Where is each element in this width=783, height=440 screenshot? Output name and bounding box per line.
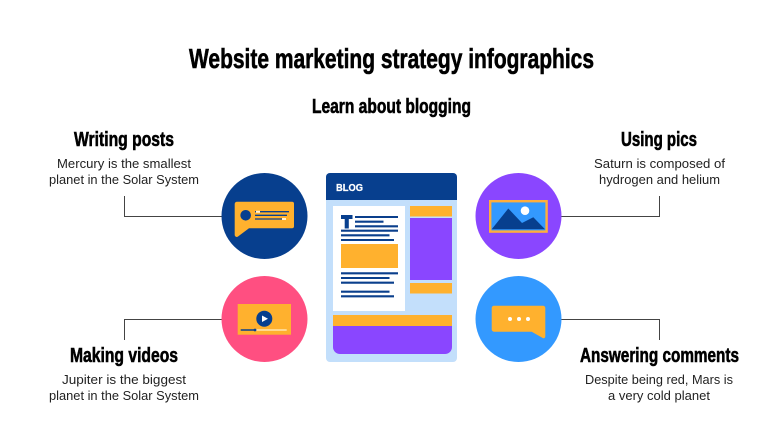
- text block: writing posts: planet in the Solar System: [49, 172, 199, 187]
- icon: writing posts speech bubble: [222, 173, 308, 259]
- text block: making videos: Jupiter is the biggest: [62, 372, 186, 387]
- text block: using pics: Saturn is composed of: [594, 156, 725, 171]
- icon: making videos player: [222, 276, 308, 362]
- text block: writing posts: Mercury is the smallest: [57, 156, 191, 171]
- title: Website marketing strategy infographics: [189, 43, 594, 74]
- article card: [333, 206, 405, 311]
- text block: making videos: planet in the Solar System: [49, 388, 199, 403]
- connector: writing posts: [124, 196, 222, 216]
- panel: blog page illustration: [326, 173, 457, 362]
- connector: using pics: [561, 196, 660, 216]
- text block: answering comments: Answering comments: [580, 345, 739, 367]
- sidebar: [410, 206, 452, 294]
- text block: using pics: [594, 129, 725, 187]
- text block: making videos: [49, 345, 199, 403]
- text block: answering comments: a very cold planet: [608, 388, 710, 403]
- text block: making videos: Making videos: [70, 345, 178, 367]
- blog header label: BLOG: [336, 182, 363, 194]
- icon: using pics picture frame: [476, 173, 562, 259]
- text block: writing posts: [49, 129, 199, 187]
- blog header bar: [326, 173, 457, 200]
- footer block: [333, 315, 452, 354]
- connector: making videos: [124, 320, 222, 340]
- text block: using pics: hydrogen and helium: [599, 172, 720, 187]
- subtitle: Learn about blogging: [312, 96, 471, 118]
- text block: writing posts: Writing posts: [74, 129, 174, 151]
- icon: answering comments speech bubble: [476, 276, 562, 362]
- text block: answering comments: [580, 345, 739, 403]
- connector: answering comments: [561, 320, 660, 340]
- text block: using pics: Using pics: [621, 129, 697, 151]
- text block: answering comments: Despite being red, Mars is: [585, 372, 733, 387]
